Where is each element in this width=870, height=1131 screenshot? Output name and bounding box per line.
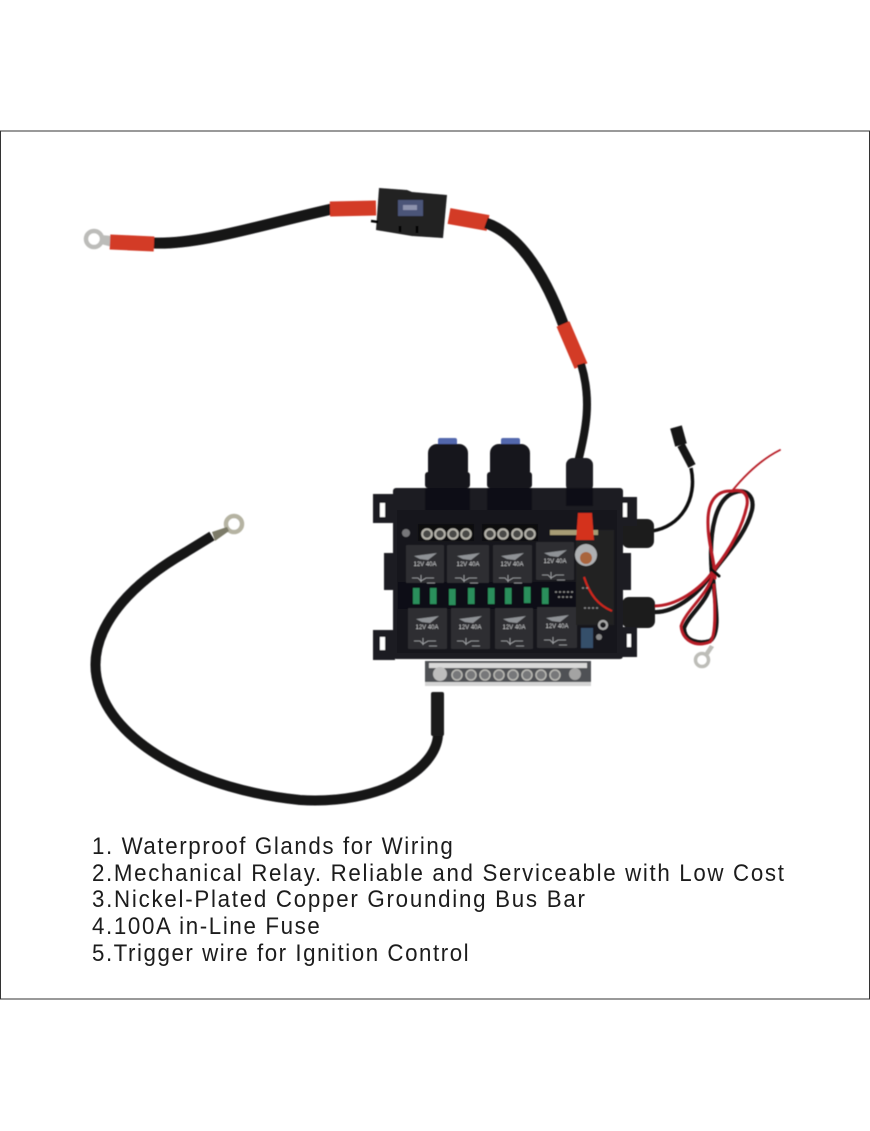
waterproof glands, right side: [622, 519, 655, 628]
lower ground cable: [96, 516, 444, 800]
green blade fuses: [413, 587, 548, 605]
relay markings: [412, 550, 569, 646]
relay labels: 12V 40A: [502, 625, 526, 631]
icon: small ring terminal: [696, 645, 714, 666]
feature 5: 5.Trigger wire for Ignition Control: [92, 939, 469, 966]
feature 1: 1. Waterproof Glands for Wiring: [92, 832, 453, 859]
relay labels: 12V 40A: [500, 562, 524, 568]
relays, top row: [406, 542, 574, 583]
relays, bottom row: [408, 607, 577, 649]
interior: [397, 510, 617, 653]
frame border: [0, 131, 870, 999]
power stud and control circuit board: [550, 513, 614, 648]
terminal strips: [402, 524, 538, 541]
mounting ears: [373, 494, 637, 660]
feature 2: 2.Mechanical Relay. Reliable and Serviceable with Low Cost: [92, 859, 784, 886]
junction box enclosure: [373, 488, 637, 660]
icon: ring terminal: [86, 231, 102, 247]
relay labels: 12V 40A: [458, 625, 482, 631]
feature 3: 3.Nickel-Plated Copper Grounding Bus Bar: [92, 885, 585, 912]
relay labels: 12V 40A: [413, 562, 437, 568]
waterproof glands, top: [425, 438, 593, 492]
upper power cable with in-line fuse: [86, 188, 587, 462]
product photo illustration: [86, 188, 780, 800]
red and black power leads: [654, 450, 780, 644]
relay labels: 12V 40A: [415, 625, 439, 631]
icon: fuse holder: [371, 188, 447, 238]
icon: ring terminal: [226, 516, 242, 532]
trigger wire with connector: [652, 427, 693, 531]
feature list: [92, 832, 784, 966]
relay labels: 12V 40A: [543, 559, 567, 565]
relay labels: 12V 40A: [545, 624, 569, 630]
relay labels: 12V 40A: [456, 562, 480, 568]
feature 4: 4.100A in-Line Fuse: [92, 912, 320, 939]
bus bar: [425, 661, 591, 686]
relay labels: [413, 559, 569, 631]
